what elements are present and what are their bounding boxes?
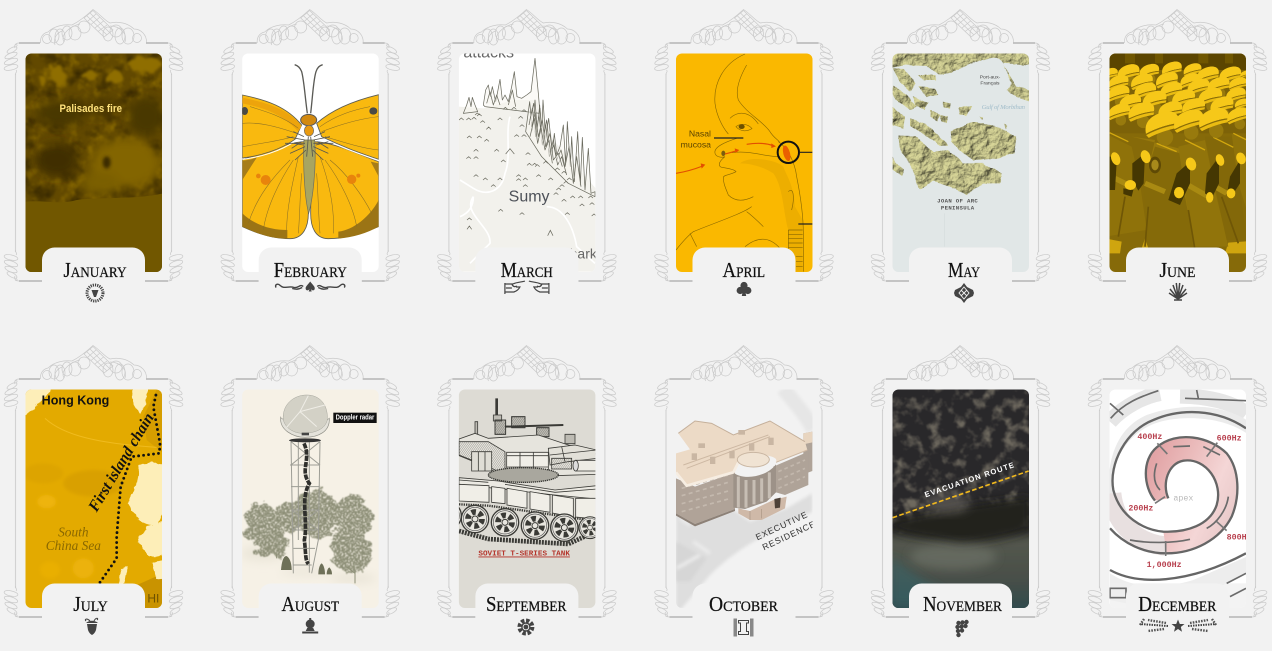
label: Sumy: Sumy	[509, 188, 550, 205]
labels: frequencies	[1128, 432, 1252, 570]
title: February: February	[274, 258, 347, 282]
ornate frame	[220, 10, 400, 281]
ornate frame	[871, 10, 1050, 281]
label: South China Sea: China Sea	[46, 538, 101, 553]
tab	[1126, 248, 1229, 284]
ornate frame	[654, 346, 834, 617]
track	[459, 531, 597, 544]
collars and sleeves	[1110, 133, 1247, 152]
title: January: January	[64, 258, 127, 282]
caption: Soviet T-series tank: SOVIET T-SERIES TANK	[478, 550, 570, 558]
skirt plates	[459, 484, 597, 519]
image: Doppler radar tower	[240, 389, 380, 609]
ornate frame	[871, 346, 1050, 617]
title: November: November	[923, 592, 1002, 616]
title: July: July	[73, 592, 108, 616]
card: April	[654, 10, 834, 296]
label: South China Sea: South	[58, 525, 89, 540]
card: August	[220, 346, 400, 634]
forewings	[242, 95, 379, 159]
card: January	[4, 10, 183, 301]
title: May: May	[948, 258, 980, 282]
chimneys	[692, 430, 774, 464]
image: South China Sea map	[23, 388, 165, 610]
dotted line: first island chain	[100, 392, 160, 582]
labels: frequencies: 1,000Hz	[1147, 560, 1182, 570]
portico colonnade	[733, 464, 776, 509]
icon: chess bishop	[302, 618, 318, 634]
icon: club	[737, 282, 751, 296]
title: March: March	[501, 258, 553, 282]
icon: pointing hands	[505, 281, 549, 294]
trees	[243, 490, 372, 573]
right edge wing	[803, 432, 812, 474]
tab	[692, 248, 796, 284]
label: Doppler radar	[333, 413, 377, 423]
label: Port-aux-Français: Port-aux-	[980, 74, 1001, 80]
label: HI: HI	[147, 592, 159, 606]
ornate frame	[4, 346, 183, 617]
labels: frequencies: 200Hz	[1128, 503, 1153, 513]
label: Executive Residence: EXECUTIVE	[754, 509, 809, 542]
icon: spade with curls	[276, 282, 345, 292]
lower legs and hems	[1105, 238, 1247, 253]
labels: frequencies: 600Hz	[1217, 434, 1242, 444]
card: June	[1088, 10, 1267, 300]
image: nasal anatomy	[676, 53, 814, 273]
title: August: August	[282, 592, 339, 616]
label: Palisades fire: Palisades fire	[60, 103, 122, 115]
label: apex: apex	[1173, 494, 1193, 504]
image: Gulf of Morbihan map	[890, 52, 1030, 273]
card: October	[654, 346, 834, 636]
icon: acorn	[85, 618, 98, 635]
armour drums	[507, 452, 548, 470]
hats	[1110, 62, 1246, 146]
card: September	[434, 346, 617, 634]
left wing wall	[676, 472, 735, 524]
uniforms	[1110, 136, 1146, 236]
tab	[475, 248, 578, 284]
labels: frequencies: 400Hz	[1137, 432, 1162, 442]
title: October: October	[709, 592, 778, 616]
tab	[909, 584, 1012, 620]
image: tank engraving	[434, 389, 601, 609]
image: cochlea spiral	[1108, 389, 1252, 610]
label: Gulf of Morbihan: Gulf of Morbihan	[982, 104, 1026, 111]
ornate frame	[654, 10, 834, 281]
frequency ticks	[1155, 443, 1227, 556]
ornate frame	[1088, 346, 1267, 617]
image: aerial forest photo	[882, 389, 1040, 619]
tab	[1126, 584, 1229, 620]
spiral outlines	[1110, 412, 1246, 580]
label: First island chain: First island chain	[85, 410, 158, 516]
ornate frame	[4, 10, 183, 281]
radar dome	[281, 417, 329, 437]
title: June: June	[1160, 258, 1196, 282]
dashed line: evacuation route	[893, 471, 1029, 518]
tab	[259, 248, 362, 284]
image: marching soldiers	[1110, 54, 1246, 272]
ornate frame	[1088, 10, 1267, 281]
tab	[42, 584, 145, 620]
tower	[290, 442, 320, 573]
ornate frame	[437, 10, 617, 281]
card: March	[437, 10, 617, 294]
hull deck	[459, 478, 597, 499]
chevron marks	[459, 107, 596, 236]
roof	[676, 421, 807, 486]
tab	[259, 584, 362, 620]
label: Port-aux-Français: Français	[980, 81, 1000, 87]
tab	[909, 248, 1012, 284]
gloves	[1109, 149, 1247, 203]
title: December: December	[1138, 592, 1216, 616]
image: Palisades fire photo	[25, 53, 165, 273]
dark arms	[1110, 153, 1240, 205]
labels: frequencies: 800Hz	[1227, 532, 1252, 542]
body	[304, 140, 315, 213]
label: Doppler radar: Doppler radar	[336, 415, 375, 422]
icon: gear	[519, 620, 532, 634]
label: Nasal mucosa: Nasal	[689, 129, 711, 139]
title: April: April	[723, 258, 765, 282]
gear	[488, 468, 558, 482]
tab	[42, 248, 145, 284]
label: Kharkiv: Kharkiv	[560, 246, 607, 262]
image: ridgeline attack map	[459, 54, 596, 272]
card: November	[871, 346, 1050, 637]
image: executive residence: RESIDENCE	[761, 519, 817, 552]
tab	[475, 584, 578, 620]
icon: grapes	[955, 620, 969, 637]
ground	[676, 493, 812, 615]
tab	[692, 584, 796, 620]
icon: lion sun	[87, 285, 103, 301]
label: attacks: attacks	[463, 44, 514, 61]
pink basilar band	[1146, 437, 1237, 553]
image: executive residence	[676, 388, 817, 615]
turret body	[459, 433, 597, 479]
card: May	[871, 10, 1050, 303]
image: butterfly	[241, 53, 380, 273]
card: July	[4, 346, 183, 635]
title: September: September	[486, 592, 566, 616]
label: Joan of Arc Peninsula: JOAN OF ARC	[937, 197, 978, 204]
barrel	[576, 460, 597, 471]
icon: rook in hatched square	[734, 618, 754, 636]
card: February	[220, 10, 400, 292]
turret top equipment	[493, 398, 501, 415]
icon: ornamental diamond	[954, 283, 974, 303]
arrows	[676, 143, 773, 173]
right wing wall	[773, 452, 808, 495]
label: Hong Kong: Hong Kong	[42, 394, 109, 408]
steps	[738, 497, 787, 520]
hindwings	[242, 142, 379, 239]
ornate frame	[437, 346, 617, 617]
ridgelines	[463, 58, 595, 197]
label: Nasal mucosa: mucosa	[681, 139, 711, 149]
label: Evacuation route: EVACUATION ROUTE	[923, 460, 1016, 499]
icon: shell	[1169, 283, 1187, 300]
label: Joan of Arc Peninsula: PENINSULA	[941, 204, 975, 211]
icon: star and laurels	[1140, 619, 1216, 632]
badge	[1149, 157, 1161, 173]
card: December	[1088, 346, 1267, 632]
ornate frame	[220, 346, 400, 617]
